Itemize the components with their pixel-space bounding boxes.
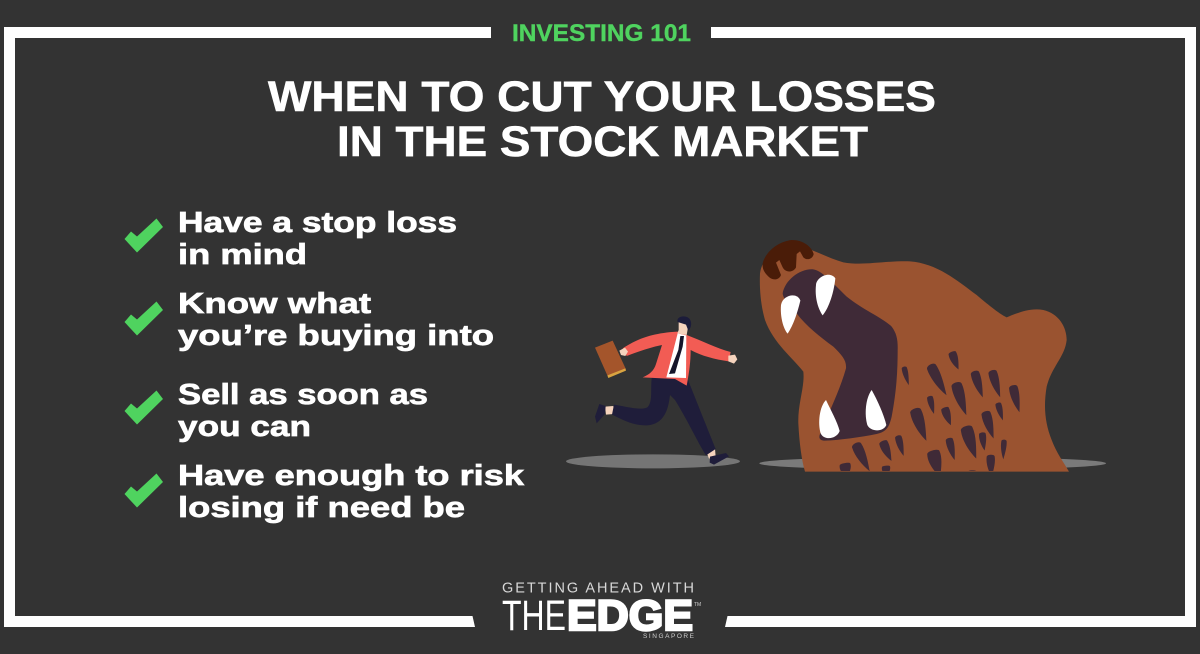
fur marks: [840, 351, 1020, 471]
logo: The Edge Singapore: THE: [502, 592, 566, 640]
item: enough to risk: Have enough to risk: [178, 460, 525, 492]
logo: The Edge Singapore: [502, 580, 701, 640]
item: sell soon: you can: [178, 411, 311, 443]
bear body: [760, 245, 1069, 472]
item: enough to risk: losing if need be: [178, 492, 465, 524]
item: stop loss: in mind: [178, 239, 307, 271]
item: stop loss: [124, 207, 457, 271]
item: sell soon: [124, 379, 428, 443]
title: [268, 73, 936, 166]
label: investing 101: INVESTING 101: [512, 20, 691, 47]
item: stop loss: Have a stop loss: [178, 207, 457, 239]
nose: [763, 240, 814, 279]
logo: The Edge Singapore: TM: [694, 602, 701, 608]
title: WHEN TO CUT YOUR LOSSES: [268, 73, 936, 121]
item: sell soon: Sell as soon as: [178, 379, 428, 411]
logo: The Edge Singapore: EDGE: [567, 592, 693, 640]
item: know what you are buying: [124, 288, 494, 352]
illustration: running businessman: [566, 316, 740, 468]
item: know what you are buying: you’re buying into: [178, 320, 494, 352]
illustration: brown bear: [759, 240, 1106, 481]
logo: The Edge Singapore: SINGAPORE: [643, 633, 695, 640]
item: know what you are buying: Know what: [178, 288, 371, 320]
item: enough to risk: [124, 460, 525, 524]
title: IN THE STOCK MARKET: [337, 118, 868, 166]
checklist: [124, 207, 525, 524]
teeth: [781, 275, 886, 438]
hole in the ground: [759, 457, 1106, 470]
mouth: [783, 269, 898, 441]
logo: The Edge Singapore: GETTING AHEAD WITH: [502, 580, 694, 596]
